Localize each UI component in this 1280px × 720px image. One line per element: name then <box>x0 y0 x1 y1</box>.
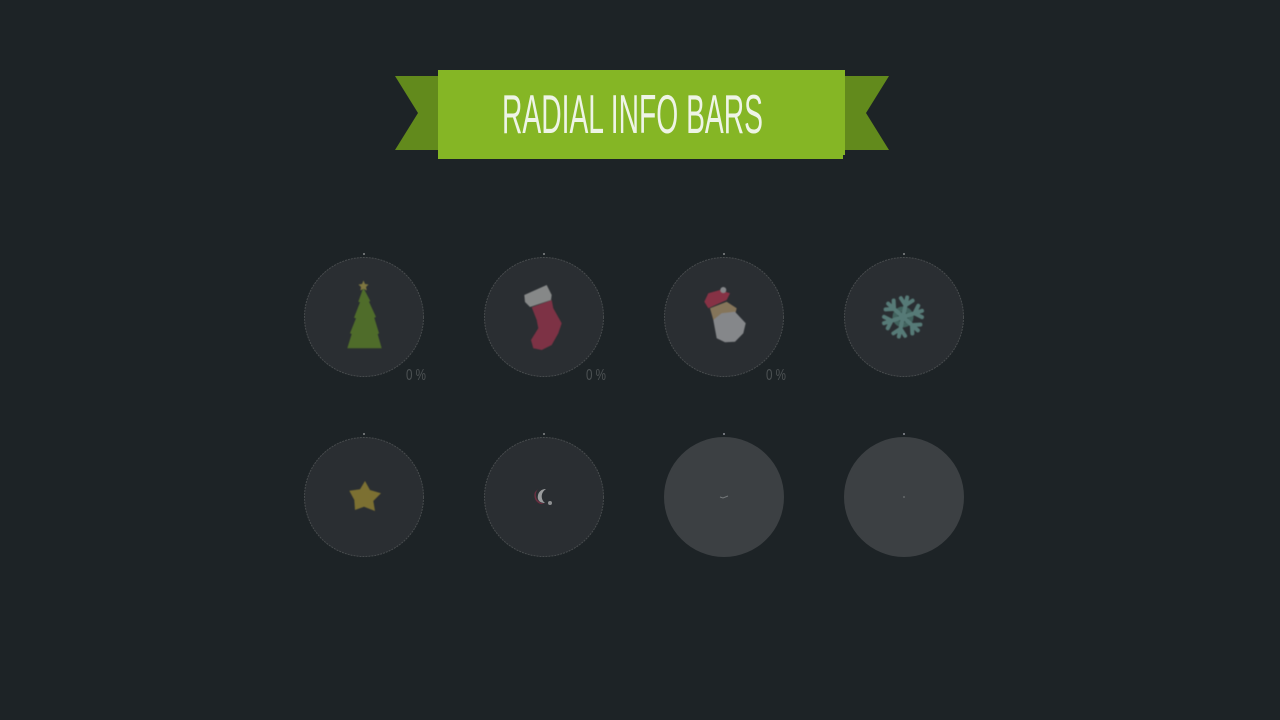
banner main panel <box>438 70 845 159</box>
panel: tree radial <box>304 253 426 384</box>
icon: tiny mark <box>720 496 728 498</box>
panel: star radial <box>304 433 424 556</box>
panel: santa radial <box>664 253 786 384</box>
title: RADIAL INFO BARS <box>502 83 763 145</box>
panel: snowflake radial <box>844 253 964 376</box>
title banner <box>395 70 889 159</box>
percent label: 0 % <box>586 367 606 384</box>
panel: blank radial two <box>844 433 964 557</box>
icon: santa <box>704 287 746 342</box>
icon: star <box>349 481 381 511</box>
banner right tail <box>844 76 889 150</box>
panel: stocking radial <box>484 253 606 384</box>
percent label: 0 % <box>766 367 786 384</box>
icon: christmas tree <box>347 280 382 348</box>
panel: moon radial <box>484 433 604 556</box>
panel: blank radial one <box>664 433 784 557</box>
banner left tail <box>395 76 439 150</box>
percent label: 0 % <box>406 367 426 384</box>
icon: stocking <box>524 285 562 350</box>
icon: crescent <box>534 489 552 505</box>
icon: tiny dot <box>903 496 905 498</box>
icon: snowflake <box>879 293 927 341</box>
